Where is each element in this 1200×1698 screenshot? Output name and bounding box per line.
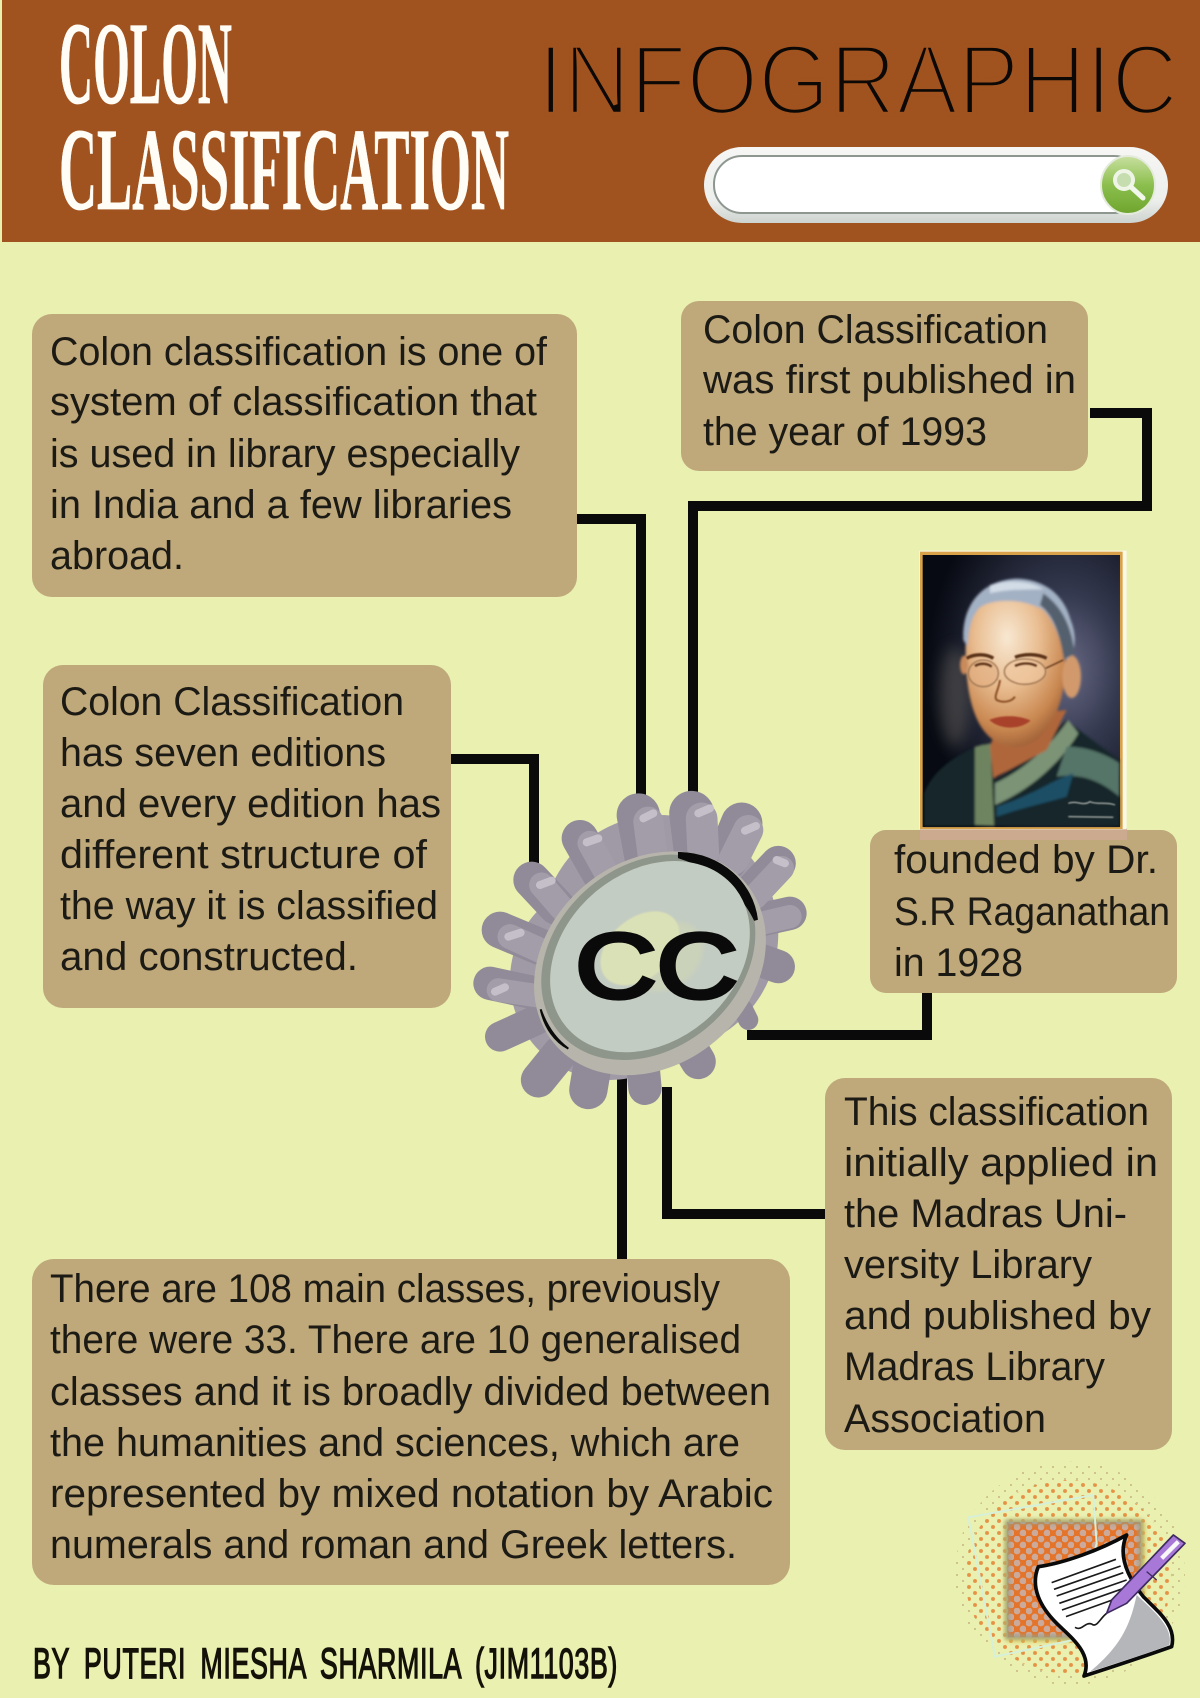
header band: CLASSIFICATION bbox=[59, 104, 509, 235]
panel: main classes: There are 108 main classes, previously bbox=[50, 1267, 720, 1311]
panel: seven editions: and constructed. bbox=[60, 935, 358, 979]
panel: founder: S.R Raganathan bbox=[894, 890, 1170, 934]
panel: seven editions bbox=[43, 665, 451, 1008]
hair bbox=[963, 579, 1075, 659]
author credit: BY PUTERI MIESHA SHARMILA (JIM1103B) bbox=[33, 1640, 618, 1688]
panel: seven editions: and every edition has bbox=[60, 782, 441, 826]
gear teeth bbox=[490, 808, 790, 1090]
panel: Madras University bbox=[825, 1078, 1172, 1450]
panel: main classes: the humanities and sciences, which are bbox=[50, 1421, 740, 1465]
title: colon classification bbox=[59, 0, 509, 235]
neck and face bbox=[990, 710, 1067, 778]
panel: seven editions: Colon Classification bbox=[60, 680, 404, 724]
mouth bbox=[989, 716, 1031, 728]
panel: Madras University: and published by bbox=[844, 1294, 1151, 1338]
black crescent bottom left bbox=[541, 1009, 568, 1049]
connector wires bbox=[451, 413, 1147, 1262]
panel: first published: Colon Classification bbox=[703, 308, 1048, 352]
panel: Madras University: This classification bbox=[844, 1090, 1149, 1134]
panel: Madras University: Association bbox=[844, 1397, 1046, 1441]
panel: Madras University: initially applied in bbox=[844, 1141, 1158, 1185]
panel: Madras University: the Madras Uni- bbox=[844, 1192, 1127, 1236]
panel: what colon classification is: Colon classification is one of bbox=[50, 330, 548, 374]
signature bbox=[1068, 802, 1115, 817]
gear disc face bbox=[512, 822, 788, 1092]
paper fold shadow bbox=[1090, 1595, 1170, 1672]
gear outer ring bbox=[489, 805, 811, 1122]
panel: seven editions: has seven editions bbox=[60, 731, 386, 775]
panel: first published bbox=[681, 301, 1088, 471]
portrait of Dr. Ranganathan bbox=[919, 551, 1127, 829]
panel: seven editions: the way it is classified bbox=[60, 884, 438, 928]
paper bbox=[1035, 1535, 1173, 1676]
icon: search button bbox=[1101, 156, 1155, 214]
halftone backdrop bbox=[955, 1462, 1185, 1685]
panel: what colon classification is: in India and a few libraries bbox=[50, 483, 512, 527]
panel: main classes: there were 33. There are 10 generalised bbox=[50, 1318, 741, 1362]
panel: what colon classification is: system of classification that bbox=[50, 380, 537, 424]
panel: what colon classification is: is used in library especially bbox=[50, 432, 520, 476]
gear disc bbox=[500, 812, 797, 1103]
panel: founder bbox=[870, 828, 1177, 993]
panel: main classes: numerals and roman and Greek letters. bbox=[50, 1523, 737, 1567]
panel: main classes: classes and it is broadly divided between bbox=[50, 1370, 771, 1414]
panel: main classes: represented by mixed notation by Arabic bbox=[50, 1472, 773, 1516]
written lines bbox=[1052, 1559, 1127, 1628]
panel: Madras University: Madras Library bbox=[844, 1345, 1105, 1389]
panel: founder: founded by Dr. bbox=[894, 838, 1158, 882]
translucent sheet outline bbox=[968, 1495, 1097, 1657]
title: colon classification: COLON bbox=[59, 0, 232, 129]
panel: seven editions: different structure of bbox=[60, 833, 428, 877]
robe bbox=[924, 720, 1119, 826]
icon: document and pen bbox=[955, 1462, 1185, 1685]
painted figure bbox=[924, 579, 1119, 826]
pen bbox=[1107, 1535, 1185, 1613]
glasses and features bbox=[967, 655, 1063, 702]
left background glow bbox=[940, 647, 970, 747]
panel: founder: in 1928 bbox=[894, 941, 1023, 985]
panel: first published: the year of 1993 bbox=[703, 410, 987, 454]
search bar bbox=[704, 147, 1168, 223]
panel: what colon classification is bbox=[32, 314, 577, 597]
gear with CC bbox=[489, 805, 811, 1122]
CC letters: CC bbox=[575, 915, 738, 1017]
panel: Madras University: versity Library bbox=[844, 1243, 1092, 1287]
black crescent top right bbox=[680, 854, 756, 920]
panel: main classes bbox=[32, 1259, 790, 1585]
gear body bbox=[510, 815, 778, 1080]
panel: what colon classification is: abroad. bbox=[50, 534, 184, 578]
header band bbox=[2, 0, 1200, 242]
spectacles bbox=[969, 660, 998, 687]
panel: first published: was first published in bbox=[702, 358, 1076, 402]
